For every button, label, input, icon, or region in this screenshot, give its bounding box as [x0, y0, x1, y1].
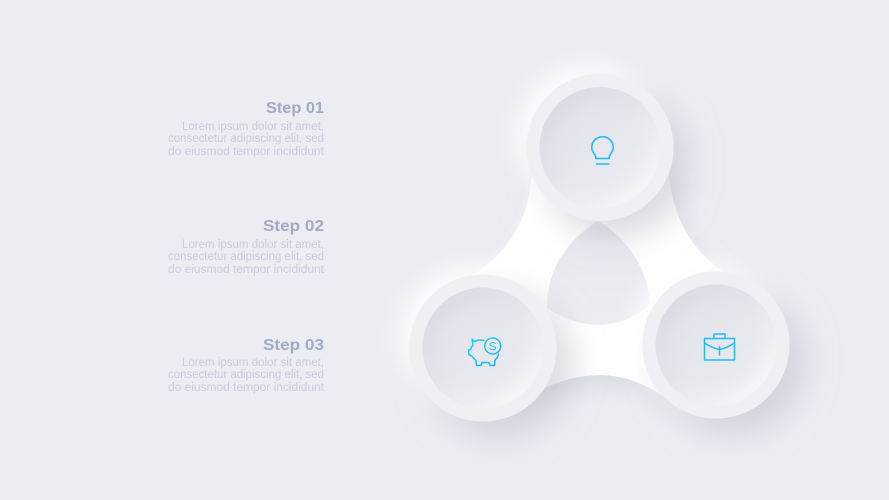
- step 01 text block: [168, 100, 325, 158]
- step 03 body: Lorem ipsum dolor sit amet,: [182, 357, 324, 369]
- step 03 body: [168, 357, 325, 394]
- right inner disc: [656, 284, 776, 406]
- step 03 body: consectetur adipiscing elit, sed: [168, 369, 324, 381]
- white connector shape: [473, 170, 726, 395]
- step 02 body: Lorem ipsum dolor sit amet,: [182, 239, 324, 251]
- step 02 body: do eiusmod tempor incididunt: [168, 264, 325, 276]
- left ring: [410, 274, 556, 422]
- step 01 body: consectetur adipiscing elit, sed: [168, 133, 324, 145]
- step 02 heading: Step 02: [263, 218, 324, 235]
- center rounded triangle: [547, 221, 650, 325]
- step 03 body: do eiusmod tempor incididunt: [168, 382, 325, 394]
- step 02 body: [168, 239, 325, 276]
- icon: briefcase: [704, 334, 734, 360]
- icon: piggy bank with coin: [468, 338, 501, 366]
- step 03 text block: [168, 337, 325, 394]
- step 02 body: consectetur adipiscing elit, sed: [168, 251, 324, 263]
- right ring: [642, 272, 790, 418]
- step 03 heading: Step 03: [263, 337, 324, 354]
- left inner disc: [422, 288, 544, 408]
- top ring: [526, 74, 674, 221]
- node: right circle: [642, 272, 790, 418]
- icon: light bulb: [592, 137, 613, 164]
- step 01 body: do eiusmod tempor incididunt: [168, 146, 325, 158]
- step 01 heading: Step 01: [266, 100, 324, 117]
- node: left circle: [410, 274, 556, 422]
- node: top circle: [526, 74, 674, 221]
- step 01 body: Lorem ipsum dolor sit amet,: [182, 121, 324, 133]
- top inner disc: [540, 87, 660, 208]
- step 01 body: [168, 121, 325, 158]
- step 02 text block: [168, 218, 325, 276]
